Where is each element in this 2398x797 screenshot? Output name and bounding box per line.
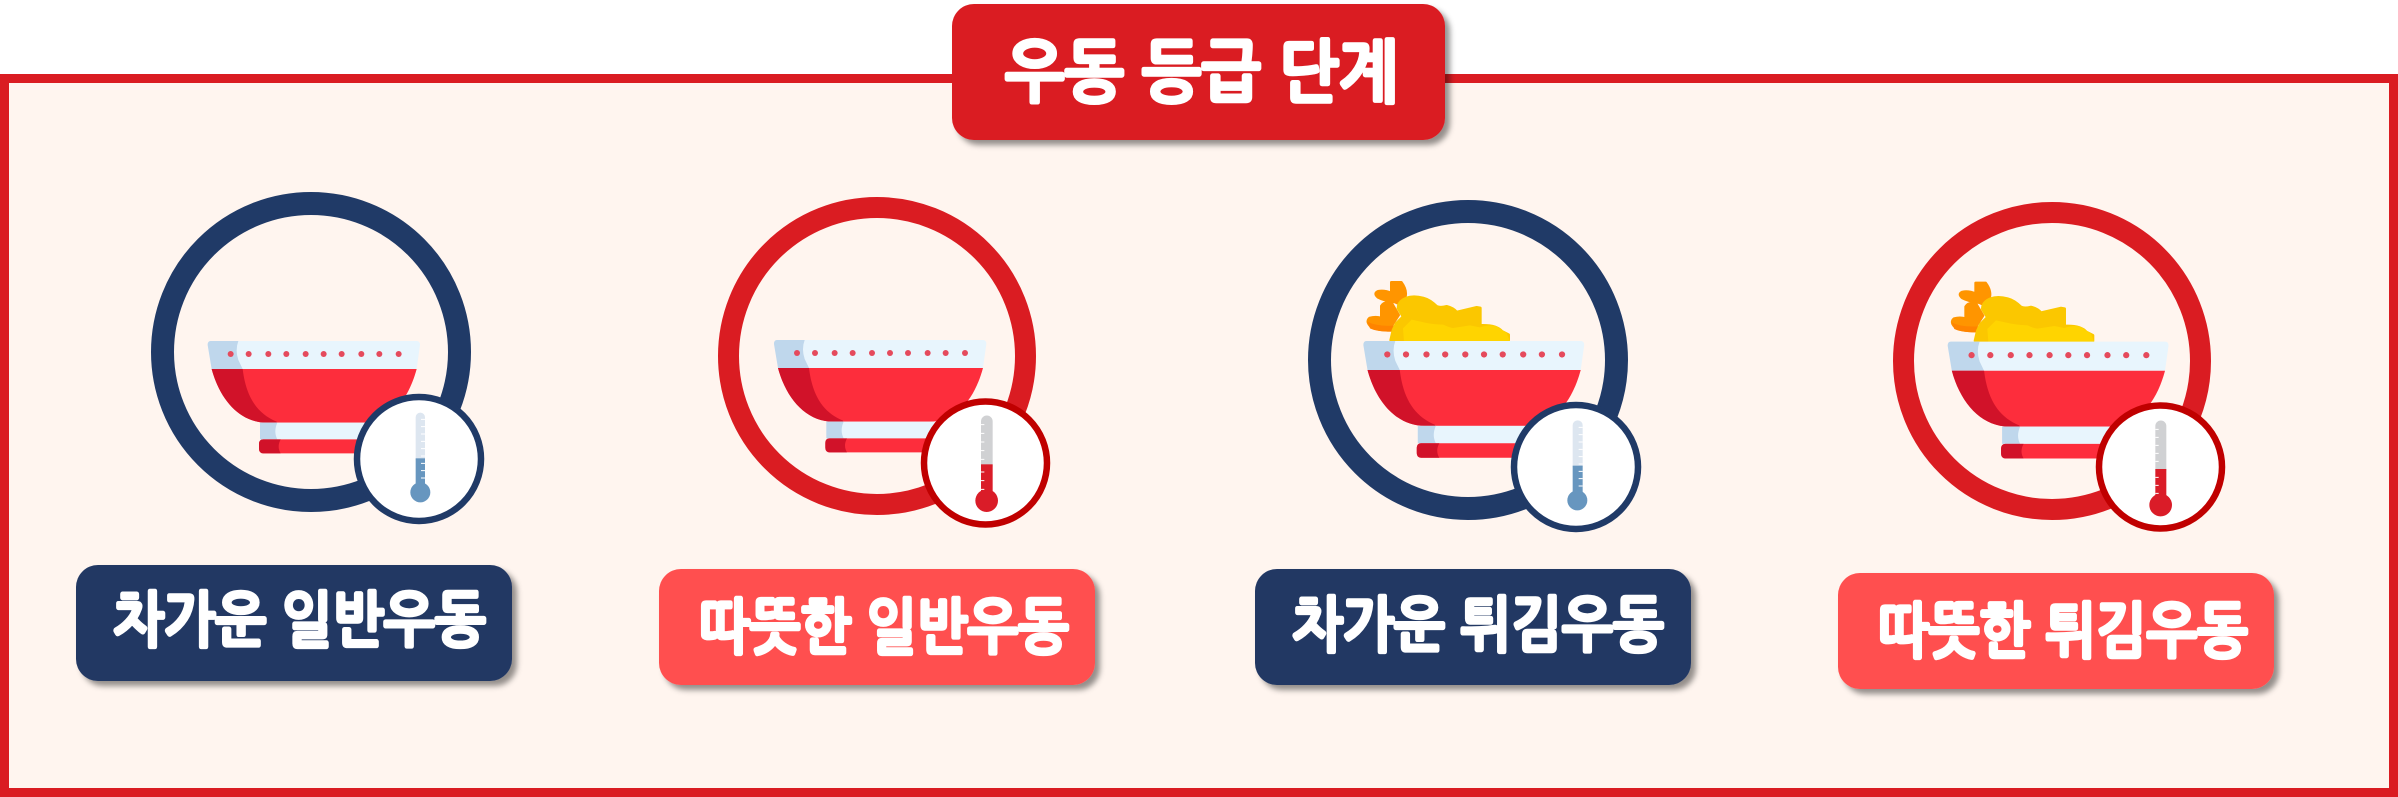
icon ring: warm tempura udon [1904, 212, 2200, 510]
label: cold tempura udon [1255, 569, 1691, 685]
icon: tempura on bowl [1952, 283, 2094, 342]
label: warm tempura udon [1838, 573, 2274, 689]
icon: cold thermometer [357, 397, 481, 521]
icon: tempura bowl [1948, 342, 2169, 458]
icon: warm thermometer [924, 402, 1047, 524]
label: warm tempura udon: 따뜻한 튀김우동 [1878, 601, 2248, 661]
icon ring: cold tempura udon [1320, 212, 1616, 508]
panel: cold tempura udon [1255, 212, 1691, 685]
label: cold tempura udon: 차가운 튀김우동 [1292, 595, 1664, 655]
heading: title badge: 우동 등급 단계 [1005, 38, 1398, 107]
icon: tempura on bowl [1367, 282, 1510, 341]
icon ring: cold plain udon [162, 204, 460, 500]
icon ring: warm plain udon [728, 208, 1026, 504]
icon: plain bowl [774, 340, 986, 452]
icon: plain bowl [208, 341, 420, 453]
icon: warm thermometer [2099, 406, 2222, 528]
label: warm plain udon: 따뜻한 일반우동 [699, 597, 1069, 657]
heading: title badge [952, 4, 1445, 140]
label: cold plain udon [76, 565, 512, 681]
icon: cold thermometer [1514, 405, 1638, 529]
label: warm plain udon [659, 569, 1095, 685]
panel: cold plain udon [76, 204, 512, 681]
icon: tempura bowl [1363, 341, 1584, 458]
label: cold plain udon: 차가운 일반우동 [113, 590, 486, 650]
panel: warm tempura udon [1838, 212, 2274, 689]
panel: warm plain udon [659, 208, 1095, 685]
